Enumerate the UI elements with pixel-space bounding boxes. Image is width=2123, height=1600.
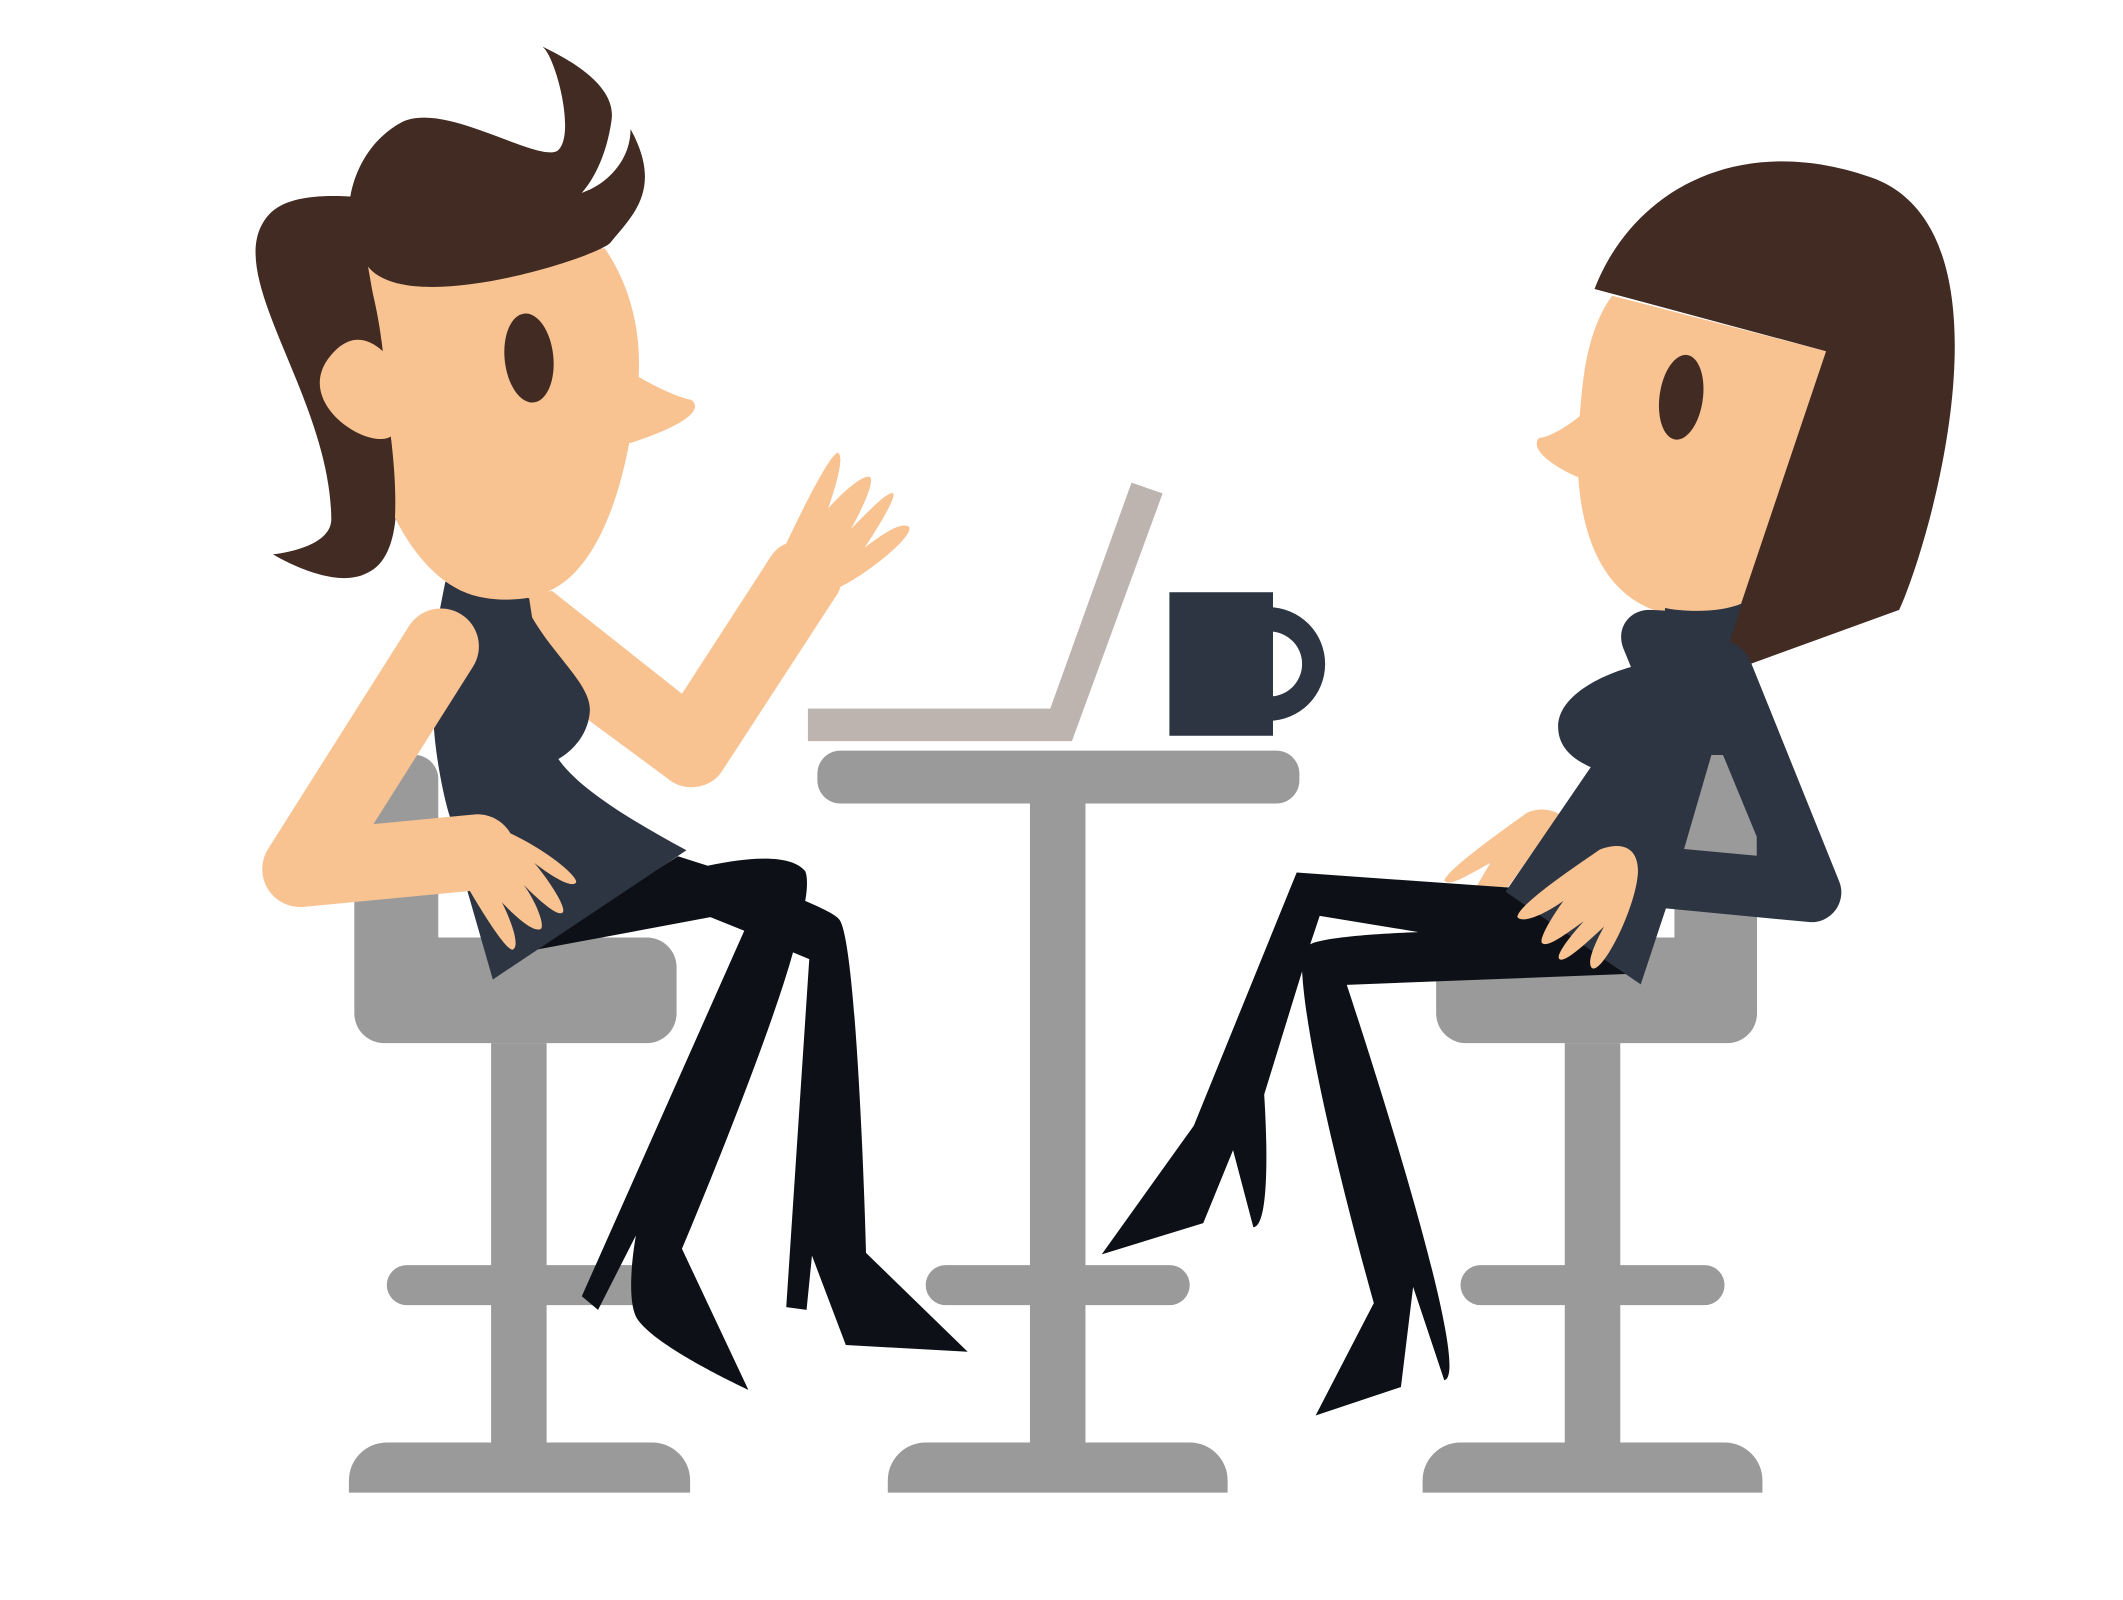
front arm [300, 646, 478, 869]
front hand [1517, 846, 1638, 969]
torso and skirt [434, 582, 686, 979]
front hand [469, 832, 576, 950]
left stool [349, 755, 690, 1493]
coffee mug [1169, 592, 1325, 736]
table [817, 751, 1299, 1493]
back hand [1444, 809, 1559, 887]
head [1537, 296, 1826, 617]
hair top [350, 47, 645, 351]
laptop [808, 483, 1163, 741]
left person [256, 47, 968, 1390]
eye [1654, 352, 1709, 443]
eye [500, 311, 558, 405]
gap between legs [1310, 916, 1419, 944]
hair back [256, 196, 407, 578]
legs [529, 856, 968, 1390]
legs [1102, 873, 1632, 1415]
stool showing through arm gap [1684, 755, 1757, 856]
right stool [1423, 755, 1762, 1493]
right person [1102, 161, 1955, 1415]
back arm and hand [515, 453, 910, 787]
hair [1595, 161, 1955, 675]
torso, skirt and arm [1506, 603, 1841, 984]
head [320, 248, 695, 600]
